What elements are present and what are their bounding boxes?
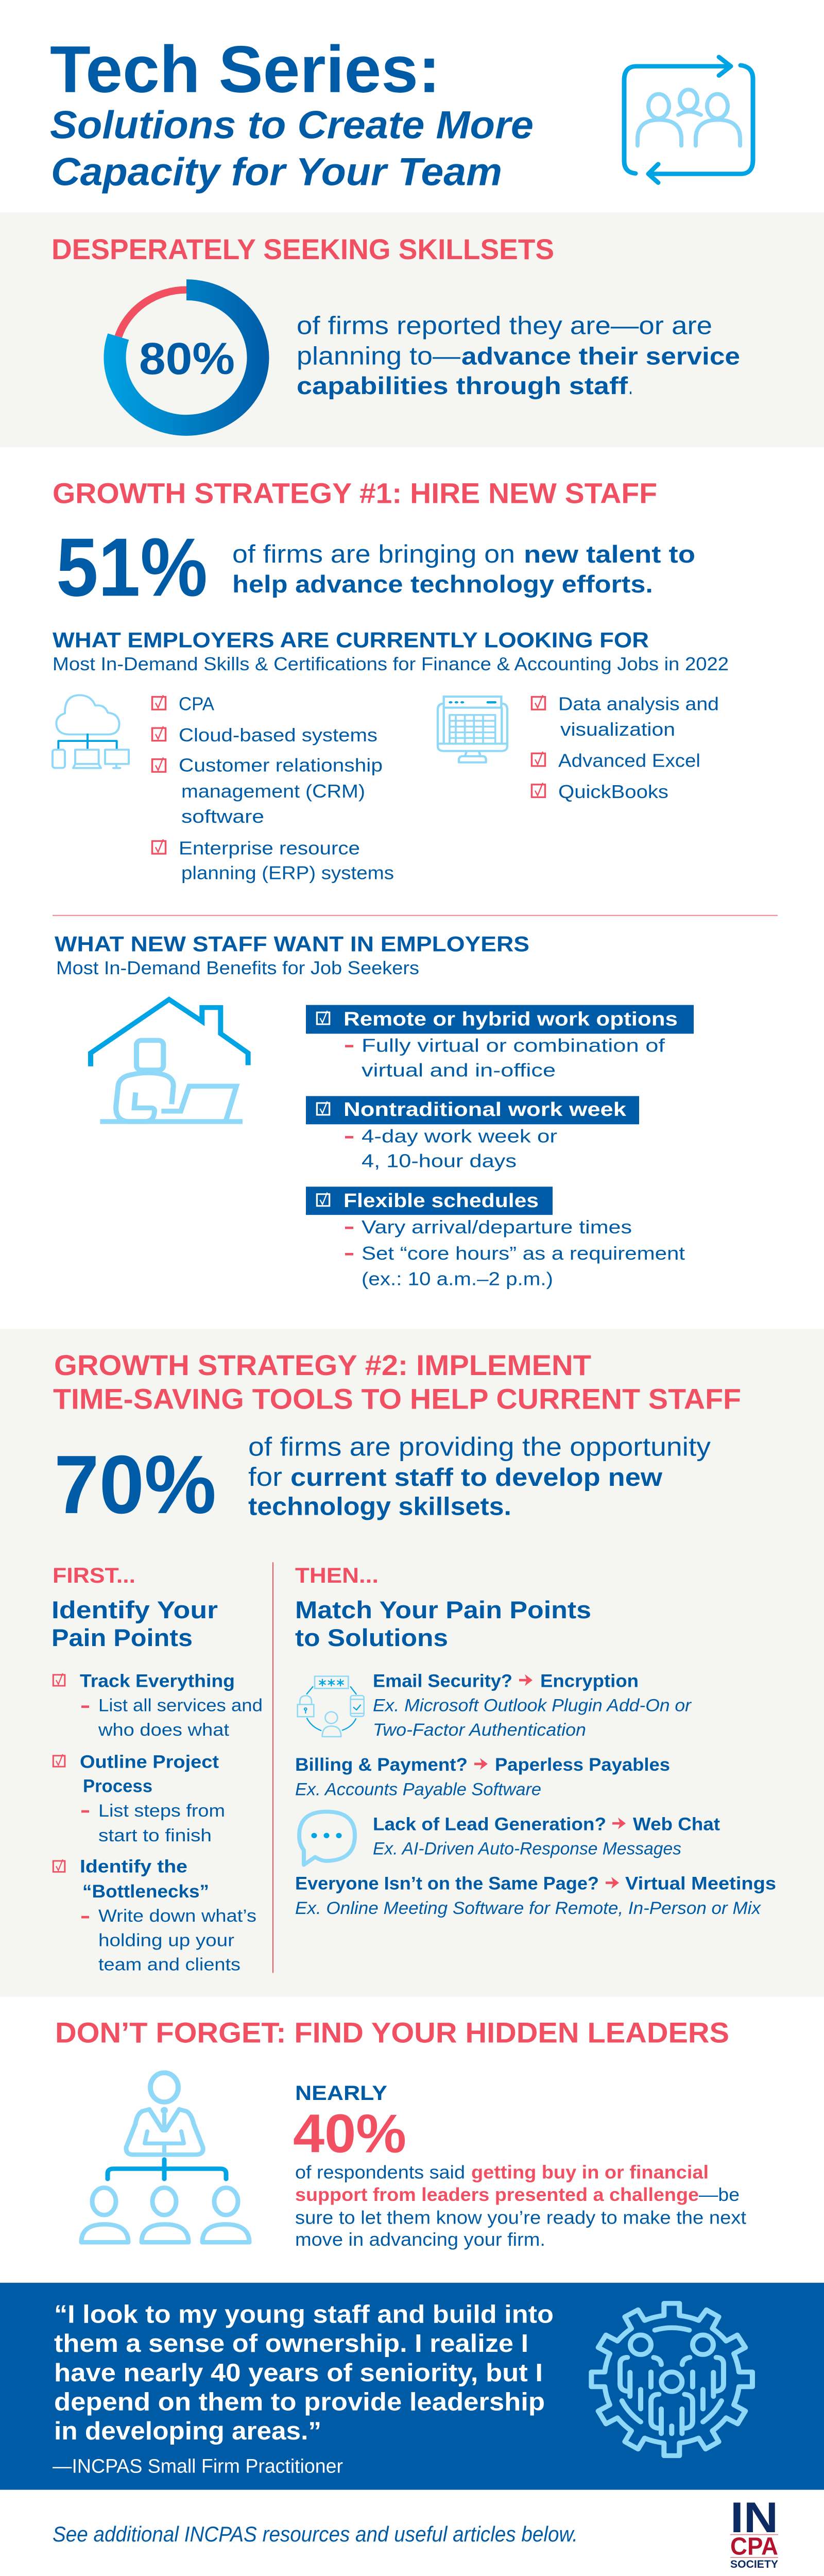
solution: billing and payment: Paperless Payables — [495, 1754, 670, 1775]
list: skills right: Data analysis and — [558, 694, 719, 714]
quote text: depend on them to provide leadership — [54, 2387, 545, 2416]
benefit: nontraditional work week: 4-day work week or — [362, 1126, 557, 1146]
column: then, match to solutions — [295, 1564, 776, 1918]
solution: lead generation — [373, 1814, 720, 1858]
panel: hidden leaders — [55, 2017, 746, 2250]
column: first, identify pain points: Write down what’s — [98, 1906, 256, 1926]
list: skills right: Advanced Excel — [558, 750, 700, 771]
heading: DESPERATELY SEEKING SKILLSETS — [52, 233, 554, 266]
solution: virtual meetings: Ex. Online Meeting Software for Remote, In-Person or Mix — [295, 1899, 761, 1918]
panel: growth strategy 2 — [0, 1329, 824, 1997]
benefit: remote or hybrid: Remote or hybrid work options — [344, 1008, 678, 1030]
column: first, identify pain points: “Bottlenecks” — [82, 1881, 209, 1902]
heading — [53, 1350, 741, 1415]
list: skills left: Enterprise resource — [179, 838, 360, 858]
chart: 80% donut — [115, 290, 258, 425]
solution: virtual meetings: Everyone Isn’t on the Same Page? — [295, 1873, 599, 1894]
solution: virtual meetings: Virtual Meetings — [625, 1873, 776, 1894]
column: then, match to solutions: to Solutions — [295, 1624, 448, 1652]
icon: person working at home — [91, 999, 248, 1124]
list: skills left — [152, 694, 394, 883]
solution: lead generation: Lack of Lead Generation? — [373, 1814, 606, 1834]
column: first, identify pain points: Track Everything — [80, 1670, 235, 1691]
text: 51% description: of firms are bringing on — [232, 539, 515, 568]
column: first, identify pain points: FIRST... — [53, 1564, 135, 1588]
text: 80% description: capabilities through staff — [297, 372, 628, 400]
solution: lead generation: Web Chat — [633, 1814, 720, 1834]
benefit: flexible schedules: Vary arrival/departure times — [362, 1217, 632, 1238]
title: Tech Series: — [50, 32, 440, 107]
column: first, identify pain points: team and clients — [98, 1955, 241, 1974]
solution: billing and payment: Ex. Accounts Payable Software — [295, 1780, 541, 1799]
quote text: “I look to my young staff and build into — [54, 2300, 554, 2328]
title — [50, 32, 534, 194]
icon: security cycle — [298, 1676, 364, 1737]
icon: leader and team — [81, 2073, 249, 2242]
stat: 51%: 51% — [56, 521, 208, 614]
solution: lead generation: Ex. AI-Driven Auto-Response Messages — [373, 1839, 681, 1858]
panel: growth strategy 1 — [53, 478, 778, 1289]
icon: gear with team — [591, 2303, 752, 2455]
quote text: in developing areas.” — [54, 2417, 321, 2445]
list: skills left: software — [181, 806, 264, 827]
text: 40% description: getting buy in or financial — [471, 2162, 709, 2182]
list: skills left: Customer relationship — [179, 755, 383, 776]
benefit: flexible schedules: Flexible schedules — [344, 1190, 539, 1212]
list: skills left: planning (ERP) systems — [181, 863, 394, 883]
solution: email security: Two-Factor Authentication — [373, 1720, 586, 1740]
solution: email security: Encryption — [540, 1670, 639, 1691]
solution: virtual meetings — [295, 1873, 776, 1918]
text: 80% description: . — [628, 372, 633, 400]
benefit: remote or hybrid — [306, 1005, 694, 1080]
footer note: See additional INCPAS resources and useful articles below. — [53, 2522, 578, 2547]
solution: email security: Ex. Microsoft Outlook Plugin Add-On or — [373, 1696, 692, 1715]
column: first, identify pain points: Process — [83, 1776, 152, 1796]
icon: team with cycle arrows — [624, 57, 753, 183]
benefit: nontraditional work week: Nontraditional work week — [344, 1099, 626, 1121]
quote text: have nearly 40 years of seniority, but I — [54, 2358, 543, 2386]
panel: quote — [0, 2283, 824, 2490]
text: 80% description: of firms reported they are—or are — [297, 311, 712, 340]
text: 80% description: planning to— — [297, 342, 460, 370]
column: first, identify pain points: Outline Project — [80, 1751, 219, 1772]
benefit: remote or hybrid: Fully virtual or combination of — [362, 1035, 665, 1056]
solution: billing and payment — [295, 1754, 670, 1799]
panel: footer — [53, 2494, 778, 2570]
text: 51% description: new talent to — [524, 541, 695, 568]
stat: 70%: 70% — [54, 1438, 216, 1531]
icon: spreadsheet monitor — [438, 697, 507, 762]
list: skills right — [531, 694, 719, 802]
column: first, identify pain points: who does what — [98, 1720, 229, 1740]
logo: INCPAS: SOCIETY — [730, 2558, 778, 2570]
logo: INCPAS: IN — [730, 2494, 778, 2541]
stat: nearly 40%: NEARLY — [295, 2081, 387, 2105]
text: 40% description: sure to let them know you’re ready to make the next — [295, 2207, 746, 2228]
text: 70% description: current staff to develop new — [290, 1463, 663, 1492]
stat: nearly 40%: 40% — [293, 2103, 406, 2164]
text: 80% description: advance their service — [461, 343, 740, 370]
column: then, match to solutions: Match Your Pain Points — [295, 1597, 591, 1624]
text: 40% description: —be — [699, 2184, 740, 2205]
icon: cloud network — [53, 695, 129, 768]
panel: desperately seeking skillsets — [0, 212, 824, 447]
solution: billing and payment: Billing & Payment? — [295, 1754, 468, 1775]
column: first, identify pain points — [52, 1564, 263, 1974]
heading: what employers want: Most In-Demand Skills & Certifications for Finance & Accounting Jobs in 2022 — [53, 654, 729, 674]
list: skills left: CPA — [179, 694, 214, 714]
text: 70% description — [248, 1432, 711, 1520]
list: skills right: visualization — [560, 719, 675, 740]
benefit: flexible schedules: (ex.: 10 a.m.–2 p.m.) — [362, 1268, 553, 1289]
quote attribution: —INCPAS Small Firm Practitioner — [53, 2456, 343, 2477]
heading: what new staff want: Most In-Demand Benefits for Job Seekers — [56, 958, 419, 978]
chart: 80% donut: 80% — [139, 333, 235, 384]
column: first, identify pain points: holding up your — [98, 1930, 234, 1950]
heading: what employers want — [53, 629, 729, 674]
title: Solutions to Create More — [50, 104, 534, 147]
text: 40% description: of respondents said — [295, 2162, 465, 2182]
heading: what employers want: WHAT EMPLOYERS ARE CURRENTLY LOOKING FOR — [53, 629, 649, 652]
text: 70% description: for — [248, 1462, 282, 1492]
heading: GROWTH STRATEGY #1: HIRE NEW STAFF — [53, 478, 657, 510]
column: first, identify pain points: List all services and — [98, 1696, 263, 1715]
text: 70% description: technology skillsets. — [248, 1492, 511, 1520]
quote text: them a sense of ownership. I realize I — [54, 2329, 528, 2358]
benefit: flexible schedules — [306, 1187, 685, 1289]
column: first, identify pain points: start to finish — [98, 1826, 212, 1845]
column: first, identify pain points: Identify Your — [52, 1597, 218, 1624]
solution: email security: Email Security? — [373, 1670, 512, 1691]
column: first, identify pain points: Identify the — [80, 1856, 187, 1876]
column: then, match to solutions: THEN... — [295, 1564, 379, 1588]
quote text — [54, 2300, 554, 2445]
text: 40% description — [295, 2162, 746, 2250]
benefit: flexible schedules: Set “core hours” as a requirement — [362, 1243, 685, 1264]
logo: INCPAS — [730, 2494, 778, 2570]
text: 80% description — [297, 311, 740, 400]
benefit: nontraditional work week — [306, 1096, 639, 1171]
heading: what new staff want — [55, 933, 529, 978]
text: 51% description: help advance technology efforts. — [232, 571, 653, 598]
icon: chat bubble — [299, 1811, 355, 1865]
text: 40% description: support from leaders presented a challenge — [295, 2184, 699, 2205]
panel: header — [50, 32, 753, 194]
benefit: nontraditional work week: 4, 10-hour days — [362, 1150, 517, 1171]
list: skills left: management (CRM) — [181, 781, 365, 802]
list: skills left: Cloud-based systems — [179, 725, 377, 745]
heading: GROWTH STRATEGY #2: IMPLEMENT — [54, 1350, 591, 1382]
column: first, identify pain points: Pain Points — [52, 1624, 193, 1652]
list: skills right: QuickBooks — [558, 782, 668, 802]
benefit: remote or hybrid: virtual and in-office — [362, 1060, 556, 1080]
solution: email security — [373, 1670, 692, 1740]
heading: TIME-SAVING TOOLS TO HELP CURRENT STAFF — [53, 1383, 741, 1415]
text: 40% description: move in advancing your firm. — [295, 2229, 545, 2250]
text: 70% description: of firms are providing the opportunity — [248, 1432, 711, 1462]
heading: what new staff want: WHAT NEW STAFF WANT IN EMPLOYERS — [55, 933, 529, 956]
logo: INCPAS: CPA — [730, 2532, 778, 2560]
title: Capacity for Your Team — [51, 150, 502, 194]
text: 51% description — [232, 539, 695, 598]
column: first, identify pain points: List steps from — [98, 1801, 225, 1821]
heading: DON’T FORGET: FIND YOUR HIDDEN LEADERS — [55, 2017, 729, 2049]
